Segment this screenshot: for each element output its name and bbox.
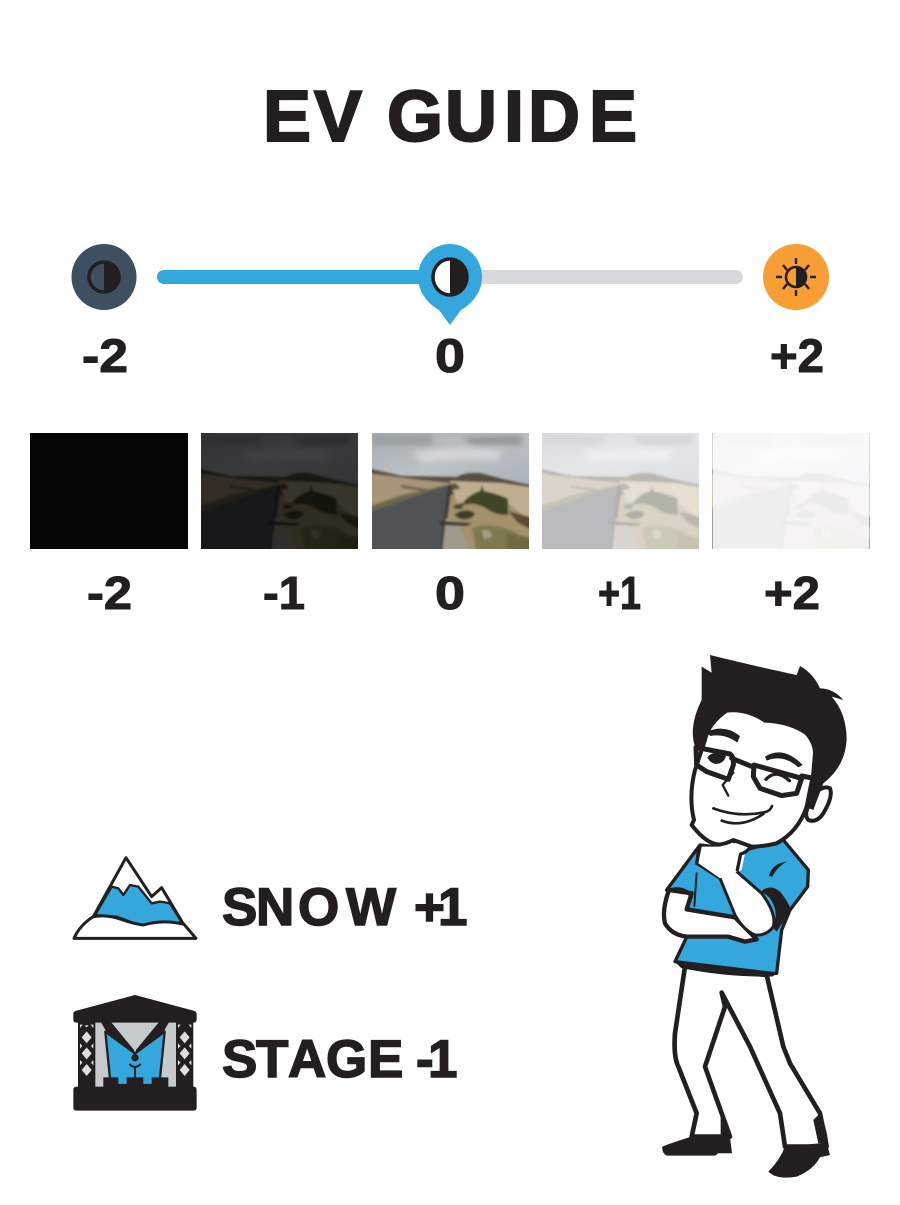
photo strip (30, 428, 874, 619)
photo: EV +2 (712, 433, 870, 549)
label: stage: STAGE -1 (0, 1030, 457, 1089)
blue light beams (105, 1032, 165, 1085)
photo: EV -1 (201, 433, 358, 549)
photo labels: -1 (263, 567, 305, 619)
hand on chin (698, 838, 753, 878)
photo labels: -2 (87, 567, 132, 619)
icon: snowy mountain (74, 858, 196, 938)
stage base (73, 1077, 197, 1111)
eyes (707, 753, 726, 764)
icon: stage (73, 995, 197, 1111)
photo labels: +1 (598, 567, 641, 619)
ear (806, 787, 831, 821)
face (691, 710, 815, 847)
shirt hem (676, 962, 776, 976)
trousers (675, 967, 827, 1147)
photo: EV 0 (372, 433, 529, 549)
photo: EV +1 (542, 433, 699, 549)
photo labels: +2 (764, 567, 820, 619)
stage row (0, 995, 457, 1111)
icon: dark exposure (72, 244, 136, 310)
performer (131, 1054, 139, 1061)
sleeve band (666, 887, 692, 897)
icon: slider pin at 0 (418, 244, 482, 325)
forearm (697, 850, 774, 935)
photo: EV -2 (30, 433, 188, 549)
back wall (93, 1022, 178, 1087)
label: snow: SNOW +1 (0, 878, 467, 937)
slider labels: 0 (435, 329, 465, 382)
mouth (713, 806, 772, 823)
slider track (157, 270, 743, 284)
icon: bright exposure sun (763, 244, 829, 310)
nose (723, 773, 733, 796)
slider labels (82, 329, 824, 382)
slider progress (157, 270, 447, 284)
snow row (0, 858, 467, 938)
glasses (696, 747, 814, 796)
character: thinking man winking (662, 655, 847, 1178)
roof (73, 995, 197, 1023)
photo labels (87, 567, 820, 619)
left shoe (662, 1136, 732, 1156)
exposure slider (72, 244, 829, 382)
left arm (664, 890, 757, 942)
truss towers (78, 1022, 95, 1088)
right shoe (768, 1143, 830, 1178)
eyebrows (707, 729, 803, 767)
title: EV GUIDE (0, 77, 637, 157)
slider labels: -2 (82, 329, 128, 382)
shirt creases (769, 862, 787, 877)
hair back (693, 655, 847, 810)
spotlight arms (101, 1022, 169, 1055)
shirt (667, 840, 808, 973)
photo labels: 0 (435, 567, 465, 619)
right sleeve band (761, 887, 791, 932)
slider labels: +2 (770, 329, 824, 382)
